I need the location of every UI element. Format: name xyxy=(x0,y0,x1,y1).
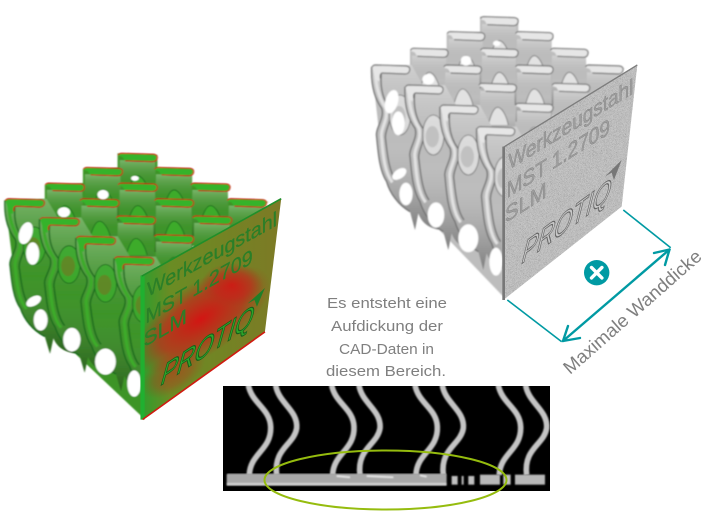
caption text: CAD-Daten in xyxy=(339,341,434,358)
front plate with engraved text: PROTIQ xyxy=(518,169,616,273)
front plate with engraved text: SLM xyxy=(144,305,187,353)
front plate with engraved text: SLM xyxy=(505,178,547,229)
dimension: maximum wall thickness xyxy=(507,210,706,378)
caption text: Aufdickung der xyxy=(331,318,443,335)
lattice structure xyxy=(372,17,625,297)
base plate xyxy=(227,474,545,486)
front plate with engraved text: PROTIQ xyxy=(157,297,259,394)
x-ray section image xyxy=(223,385,550,491)
front plate with engraved text xyxy=(503,65,637,300)
lattice structure xyxy=(5,153,268,416)
front plate with engraved text: MST 1.2709 xyxy=(507,114,610,204)
front plate with engraved text: Werkzeugstahl xyxy=(508,74,633,175)
wavy struts xyxy=(248,385,547,475)
icon: teal cross circle xyxy=(584,260,609,285)
caption text xyxy=(326,295,447,380)
caption text: diesem Bereich. xyxy=(326,363,446,380)
double arrow xyxy=(563,250,670,341)
grey CAD cube xyxy=(372,17,637,300)
green deviation cube xyxy=(5,153,290,420)
caption text: Es entsteht eine xyxy=(327,295,447,312)
front plate with engraved text: Werkzeugstahl xyxy=(147,207,277,302)
highlight ellipse xyxy=(264,450,506,510)
front plate with engraved text: MST 1.2709 xyxy=(145,245,253,329)
label: Maximale Wanddicke: Maximale Wanddicke xyxy=(559,245,706,378)
extension lines xyxy=(507,210,671,342)
front plate with engraved text xyxy=(140,198,282,420)
